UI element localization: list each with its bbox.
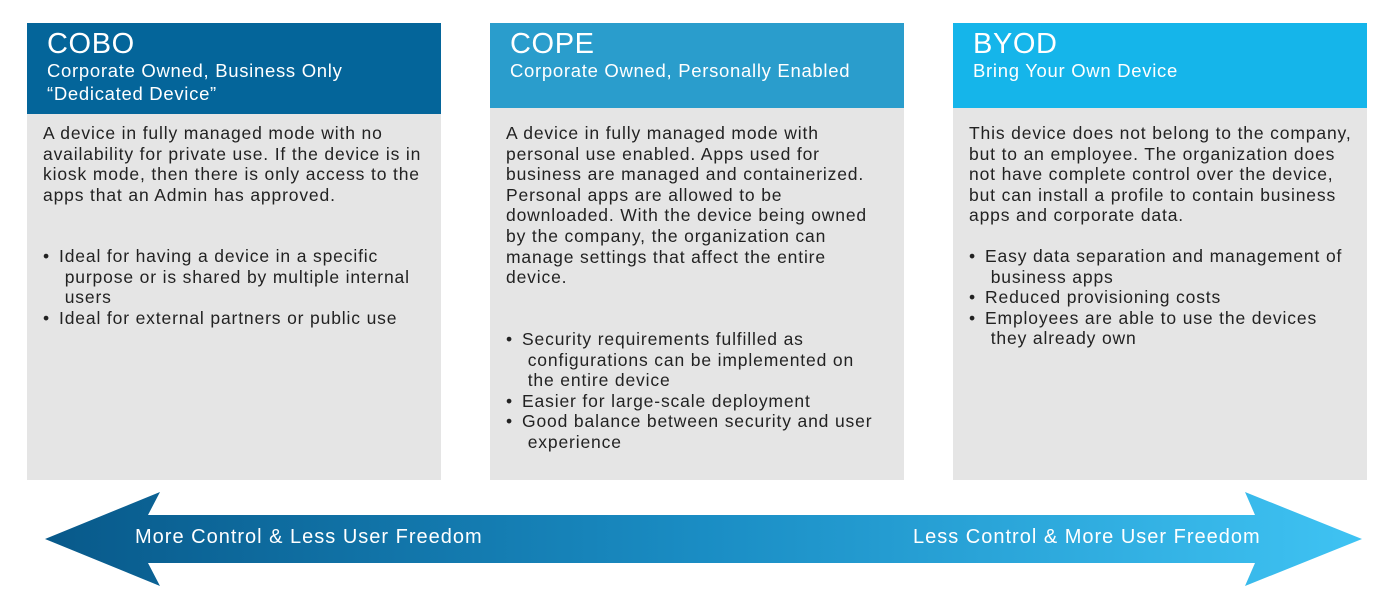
text: COPE description: device. <box>506 267 567 287</box>
header: BYOD: BYOD <box>973 28 1058 60</box>
header: COBO: COBO <box>47 28 135 60</box>
text: COPE description: downloaded. With the device being owned <box>506 205 867 225</box>
list: COBO benefits: Ideal for external partners or public use <box>59 308 397 328</box>
text: BYOD description <box>969 123 1352 225</box>
header: COBO <box>27 23 441 114</box>
text: COPE description: manage settings that affect the entire <box>506 247 826 267</box>
header: COBO: Corporate Owned, Business Only <box>47 60 343 81</box>
list: COBO benefits: purpose or is shared by multiple internal <box>65 267 410 287</box>
text: COPE description: business are managed and containerized. <box>506 164 864 184</box>
header: BYOD: Bring Your Own Device <box>973 60 1178 81</box>
list: COPE benefits <box>506 329 872 452</box>
text: COPE description: Personal apps are allowed to be <box>506 185 782 205</box>
list: BYOD benefits: they already own <box>991 328 1137 348</box>
text: COBO description: A device in fully managed mode with no <box>43 123 383 143</box>
panel: BYOD <box>953 23 1367 480</box>
label: left: More Control & Less User Freedom <box>135 526 483 548</box>
text: COBO description: availability for private use. If the device is in <box>43 144 421 164</box>
text: COBO description: apps that an Admin has approved. <box>43 185 336 205</box>
list: BYOD benefits <box>970 246 1342 348</box>
list: BYOD benefits: Easy data separation and management of <box>985 246 1342 266</box>
header: COBO: “Dedicated Device” <box>47 83 217 104</box>
list: BYOD benefits: business apps <box>991 267 1114 287</box>
text: BYOD description: This device does not belong to the company, <box>969 123 1352 143</box>
list: COPE benefits: Security requirements fulfilled as <box>522 329 804 349</box>
arrow: control vs freedom <box>45 492 1362 586</box>
list: COPE benefits: the entire device <box>528 370 671 390</box>
label: right: Less Control & More User Freedom <box>913 526 1261 548</box>
text: BYOD description: but to an employee. The organization does <box>969 144 1335 164</box>
list: COBO benefits: Ideal for having a device in a specific <box>59 246 378 266</box>
list: BYOD benefits: Employees are able to use the devices <box>985 308 1317 328</box>
list: COPE benefits: Good balance between security and user <box>522 411 872 431</box>
panel: COBO <box>27 23 441 480</box>
panel: COPE <box>490 23 904 480</box>
text: COPE description <box>506 123 867 287</box>
list: BYOD benefits: Reduced provisioning costs <box>985 287 1221 307</box>
text: BYOD description: but can install a profile to contain business <box>969 185 1336 205</box>
list: COPE benefits: configurations can be implemented on <box>528 350 854 370</box>
list: COPE benefits: experience <box>528 432 622 452</box>
text: COPE description: personal use enabled. Apps used for <box>506 144 820 164</box>
header: BYOD <box>953 23 1367 108</box>
list: COBO benefits <box>44 246 410 328</box>
list: COPE benefits: Easier for large-scale deployment <box>522 391 811 411</box>
text: COPE description: A device in fully managed mode with <box>506 123 819 143</box>
header: COPE: COPE <box>510 28 595 60</box>
text: COPE description: by the company, the organization can <box>506 226 826 246</box>
text: BYOD description: apps and corporate data. <box>969 205 1184 225</box>
text: COBO description <box>43 123 421 205</box>
header: COPE: Corporate Owned, Personally Enabled <box>510 60 850 81</box>
text: BYOD description: not have complete control over the device, <box>969 164 1334 184</box>
text: COBO description: kiosk mode, then there is only access to the <box>43 164 420 184</box>
header: COPE <box>490 23 904 108</box>
list: COBO benefits: users <box>65 287 112 307</box>
